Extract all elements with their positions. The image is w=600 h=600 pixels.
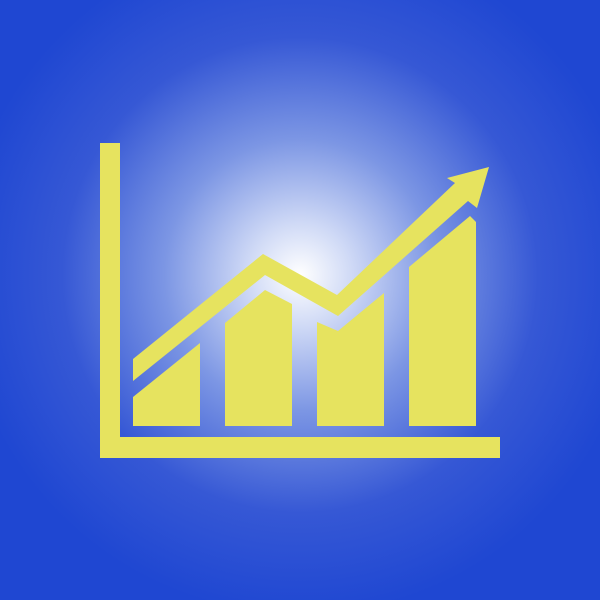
arrow: trend line [133, 167, 489, 381]
bars [133, 216, 476, 426]
axes [100, 143, 500, 458]
